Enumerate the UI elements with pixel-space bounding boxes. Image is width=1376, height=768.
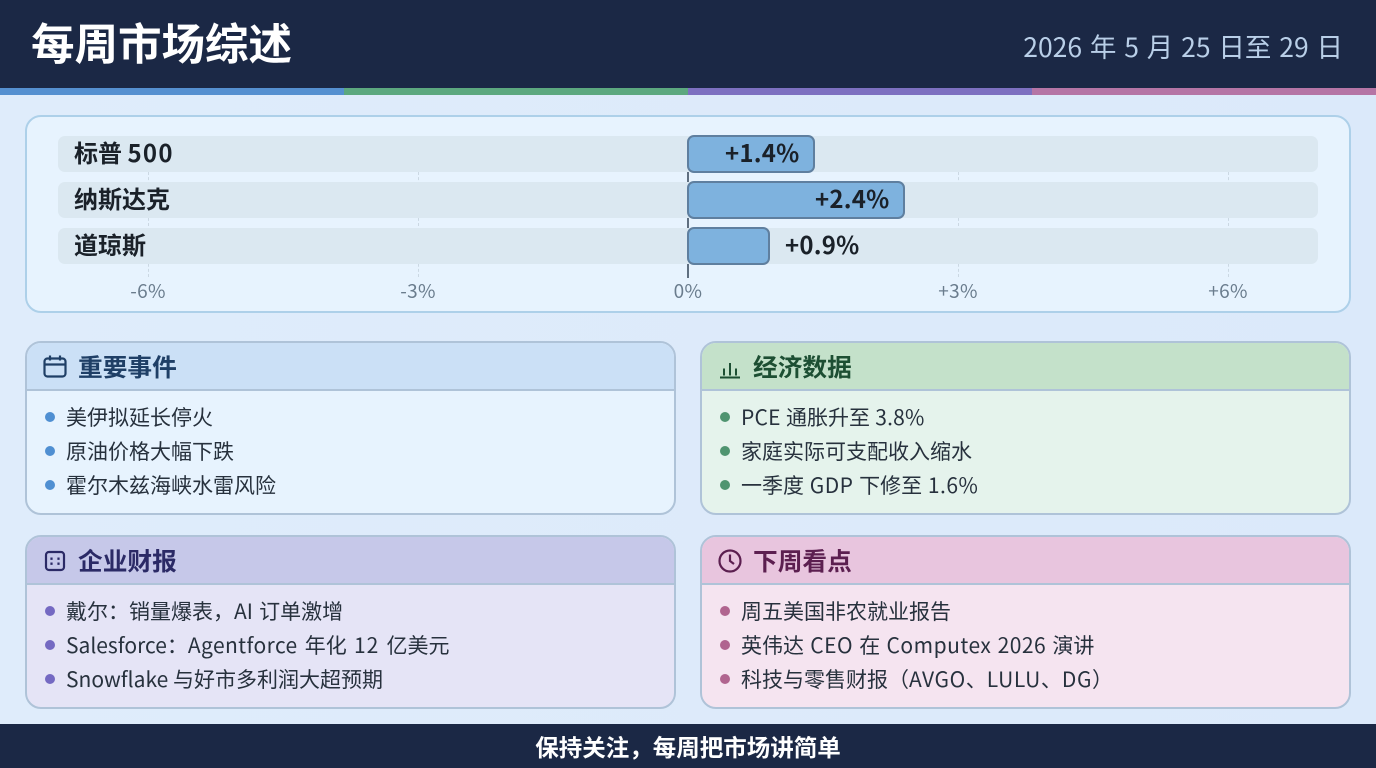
- header band: [0, 0, 1376, 88]
- bullet list: 戴尔：销量爆表，AI 订单激增: [66, 596, 343, 626]
- row: S&P 500 track: [58, 136, 1318, 172]
- icon: clock: [718, 549, 742, 573]
- bar chart: [58, 134, 1318, 304]
- bullet list: PCE 通胀升至 3.8%: [741, 402, 925, 432]
- bar: Nasdaq: [687, 181, 905, 219]
- row: Nasdaq track: [58, 182, 1318, 218]
- date range: 2026 年 5 月 25 日至 29 日: [1023, 26, 1343, 65]
- bar: S&P 500: [687, 135, 815, 173]
- panel: next week: [700, 535, 1351, 709]
- panel: earnings: [25, 535, 676, 709]
- row: Dow track: [58, 228, 1318, 264]
- bullet list: 周五美国非农就业报告: [741, 596, 951, 626]
- heading text: 企业财报: [78, 542, 177, 578]
- panel heading: economic data: [702, 343, 1349, 391]
- bullet list: 一季度 GDP 下修至 1.6%: [741, 470, 978, 500]
- bar: Dow: [687, 227, 770, 265]
- label: Nasdaq: 纳斯达克: [74, 180, 170, 215]
- axis label +6%: +6%: [1208, 277, 1248, 304]
- value: S&P 500: +1.4%: [725, 134, 799, 169]
- bullet list: 英伟达 CEO 在 Computex 2026 演讲: [741, 630, 1094, 660]
- icon: building: [44, 550, 66, 572]
- panel: index bar chart: [25, 115, 1351, 313]
- axis label 0%: 0%: [674, 277, 702, 304]
- bullet list: 科技与零售财报（AVGO、LULU、DG）: [741, 664, 1113, 694]
- label: Dow: 道琼斯: [74, 226, 146, 261]
- axis label -6%: -6%: [130, 277, 166, 304]
- footer text: 保持关注，每周把市场讲简单: [535, 729, 841, 763]
- axis label -3%: -3%: [400, 277, 436, 304]
- colour stripe: [0, 88, 1376, 95]
- bullet list: 原油价格大幅下跌: [66, 436, 234, 466]
- bullet list: 家庭实际可支配收入缩水: [741, 436, 972, 466]
- bullet list: 美伊拟延长停火: [66, 402, 213, 432]
- panel: key events: [25, 341, 676, 515]
- icon: calendar: [43, 356, 67, 378]
- title: 每周市场综述: [31, 10, 292, 73]
- panel heading: next week: [702, 537, 1349, 585]
- label: S&P 500: 标普 500: [74, 134, 174, 169]
- bullet list: [45, 596, 450, 694]
- bullet list: 霍尔木兹海峡水雷风险: [66, 470, 276, 500]
- bullet list: [45, 402, 276, 500]
- heading text: 下周看点: [753, 542, 852, 578]
- panel: economic data: [700, 341, 1351, 515]
- panel heading: key events: [27, 343, 674, 391]
- heading text: 重要事件: [78, 348, 177, 384]
- icon: bar chart: [720, 363, 740, 378]
- panel heading: earnings: [27, 537, 674, 585]
- axis label +3%: +3%: [938, 277, 978, 304]
- bullet list: [720, 402, 978, 500]
- bullet list: [720, 596, 1113, 694]
- bullet list: Salesforce：Agentforce 年化 12 亿美元: [66, 630, 450, 660]
- footer band: [0, 724, 1376, 768]
- value: Nasdaq: +2.4%: [815, 180, 889, 215]
- value: Dow: +0.9%: [785, 226, 859, 261]
- heading text: 经济数据: [753, 348, 852, 384]
- bullet list: Snowflake 与好市多利润大超预期: [66, 664, 383, 694]
